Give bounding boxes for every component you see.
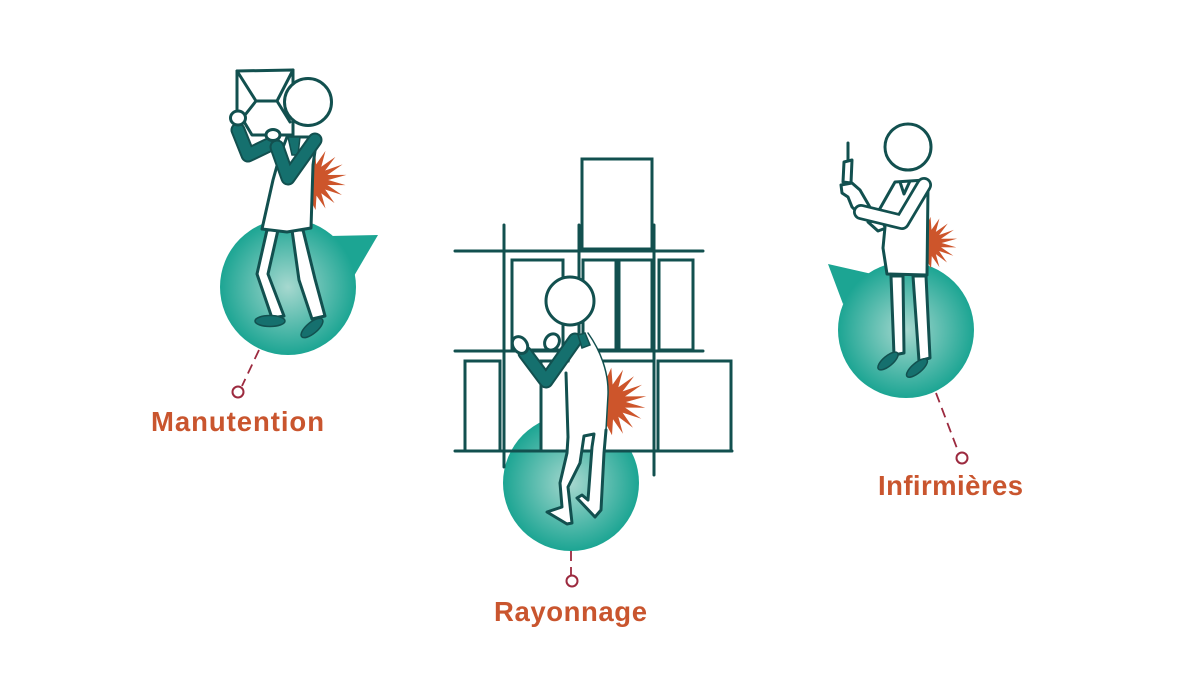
hand holding syringe [841,183,871,217]
label: Rayonnage: Rayonnage [494,596,647,627]
shoes [255,315,326,341]
head [284,78,332,126]
syringe [843,143,852,183]
label: Infirmières: Infirmières [878,470,1023,501]
shoulder strap [578,333,590,348]
head [885,124,931,170]
shoes [875,349,930,380]
icon: pain burst, lower back [605,368,646,435]
far sleeve [868,218,886,231]
near arm [266,130,315,178]
arm holding syringe [861,185,924,222]
shelving unit [455,159,732,475]
lapel [900,181,910,194]
box carried overhead [237,70,293,135]
far arm [230,111,273,155]
arm [509,334,575,381]
figure: Manutention [151,70,378,437]
coat [878,180,928,275]
speech bubble: Manutention [220,219,378,355]
icon: pain burst, lower back [309,149,346,210]
legs [891,276,930,361]
head [546,277,594,325]
figure: Rayonnage [455,159,732,627]
icon: pain burst, lower back [926,217,957,268]
speech bubble: Infirmières [828,262,974,398]
body [547,333,608,524]
shoulder strap [288,137,300,155]
label: Manutention: Manutention [151,406,324,437]
figure: Infirmières [828,124,1023,501]
speech bubble: Rayonnage [503,415,639,551]
leader line and pin [232,350,259,398]
coat [262,137,317,232]
legs [257,230,325,319]
far hand [542,331,562,353]
leader line and pin [566,551,578,586]
leader line and pin [936,393,968,464]
